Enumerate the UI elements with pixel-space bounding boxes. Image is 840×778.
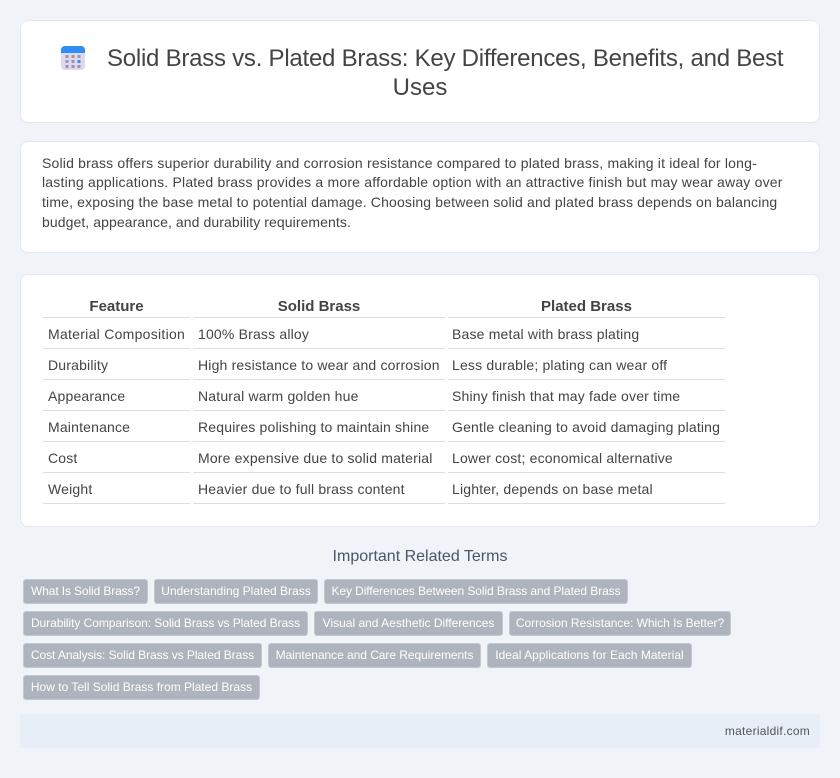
table rows: Weight <box>48 481 92 497</box>
table rows: Requires polishing to maintain shine <box>198 419 429 435</box>
related term tags: What Is Solid Brass? <box>31 584 140 598</box>
related term tags: Understanding Plated Brass <box>161 584 311 598</box>
intro text: time, exposing the base metal to potential damage. Choosing between solid and plated brass depends on balancing <box>42 194 777 210</box>
table rows: Cost <box>48 450 78 466</box>
related term tags: Cost Analysis: Solid Brass vs Plated Brass <box>31 648 254 662</box>
table rows: Durability <box>48 357 108 373</box>
heading: related terms: Important Related Terms <box>333 548 507 565</box>
table rows: Material Composition <box>48 326 185 342</box>
panel: header <box>20 20 820 123</box>
related term tags: Key Differences Between Solid Brass and Plated Brass <box>331 584 621 598</box>
table rows: Lower cost; economical alternative <box>452 450 673 466</box>
intro text <box>42 155 783 230</box>
panel: comparison table <box>20 274 820 527</box>
title: Solid Brass vs. Plated Brass: Key Differences, Benefits, and Best <box>107 45 783 72</box>
intro text: Solid brass offers superior durability and corrosion resistance compared to plated brass, making it ideal for long- <box>42 155 757 171</box>
related term tags <box>23 579 731 700</box>
title <box>107 45 784 101</box>
table header: Feature <box>89 298 144 315</box>
table header <box>89 298 632 315</box>
related term tags: Corrosion Resistance: Which Is Better? <box>516 616 724 630</box>
title: Uses <box>393 74 447 101</box>
table rows: Natural warm golden hue <box>198 388 359 404</box>
table rows: Less durable; plating can wear off <box>452 357 667 373</box>
table rows: Heavier due to full brass content <box>198 481 405 497</box>
related term tags: Visual and Aesthetic Differences <box>323 616 494 630</box>
table rows: High resistance to wear and corrosion <box>198 357 440 373</box>
related term tags: Maintenance and Care Requirements <box>276 648 473 662</box>
table rows: 100% Brass alloy <box>198 326 309 342</box>
footer bar <box>20 714 820 748</box>
table rows: Maintenance <box>48 419 130 435</box>
table rows: Base metal with brass plating <box>452 326 639 342</box>
footer source text: materialdif.com <box>725 724 810 738</box>
table rows <box>43 317 725 504</box>
icon: calendar <box>61 46 85 70</box>
table rows: Shiny finish that may fade over time <box>452 388 680 404</box>
panel: intro <box>20 141 820 253</box>
table header: Plated Brass <box>541 298 632 315</box>
related term tags: Ideal Applications for Each Material <box>495 648 684 662</box>
intro text: lasting applications. Plated brass provides a more affordable option with an attractive finish but may wear away over <box>42 174 783 190</box>
table header: Solid Brass <box>278 298 360 315</box>
table rows: Lighter, depends on base metal <box>452 481 653 497</box>
related term tags: How to Tell Solid Brass from Plated Brass <box>31 680 252 694</box>
intro text: budget, appearance, and durability requirements. <box>42 214 351 230</box>
comparison table <box>43 298 725 504</box>
table rows: More expensive due to solid material <box>198 450 432 466</box>
table rows: Appearance <box>48 388 125 404</box>
related term tags: Durability Comparison: Solid Brass vs Plated Brass <box>31 616 300 630</box>
table rows: Gentle cleaning to avoid damaging plating <box>452 419 720 435</box>
